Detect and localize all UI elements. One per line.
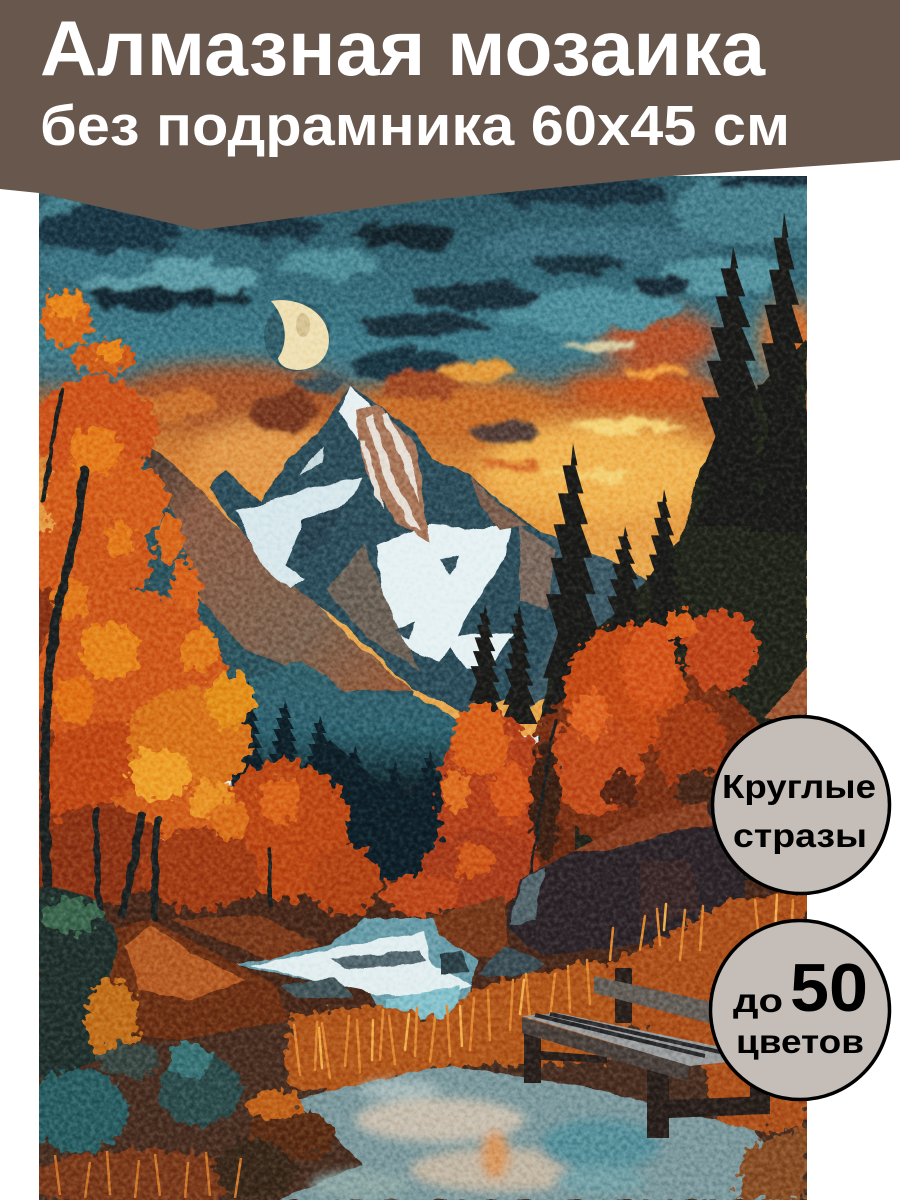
right orange grass — [600, 890, 807, 1130]
left teal-shaded mountain — [130, 456, 414, 696]
teal valley haze — [246, 661, 458, 799]
bench backrest — [594, 976, 710, 1024]
central ground — [39, 1020, 807, 1200]
badge: up to 50 colours: до — [733, 982, 783, 1019]
painterly mottled texture — [39, 176, 807, 1200]
yellow shrub — [86, 978, 138, 1062]
far bank — [430, 896, 509, 958]
bench — [522, 968, 770, 1138]
far right mountain — [528, 532, 646, 708]
badge: round rhinestones — [712, 716, 890, 894]
left brown mountain slope — [140, 440, 412, 690]
left autumn trees — [28, 290, 380, 915]
badge: round rhinestones: Круглые — [722, 768, 876, 805]
badge: up to 50 colours — [710, 920, 890, 1100]
base behind the left trees — [39, 574, 62, 898]
title: Алмазная мозаика — [40, 4, 766, 92]
sky background — [39, 176, 807, 736]
badge: up to 50 colours: 50 — [790, 950, 868, 1026]
badge: round rhinestones: стразы — [733, 817, 867, 854]
dark left undergrowth — [39, 885, 125, 1080]
tree trunks — [44, 390, 555, 918]
green shrub highlights — [40, 897, 100, 933]
orange grass band — [285, 960, 640, 1092]
right foreground grass — [735, 1125, 807, 1200]
header banner — [0, 0, 900, 230]
grass strokes — [294, 895, 793, 1078]
left foreground grass strokes — [55, 1151, 241, 1198]
gravel path — [280, 1066, 800, 1200]
bench seat — [522, 1013, 728, 1066]
base behind the central right trees — [530, 818, 575, 870]
boulder — [505, 668, 807, 955]
painting: autumn mountain landscape — [28, 173, 820, 1200]
river — [235, 918, 545, 1020]
base of the lower landscape — [39, 880, 807, 1085]
bench legs — [524, 968, 770, 1138]
dark right forest — [520, 340, 807, 900]
clouds — [36, 173, 820, 480]
moon — [264, 300, 330, 371]
snowy mountain — [208, 386, 558, 715]
badge: up to 50 colours: цветов — [736, 1023, 864, 1060]
path colour blotches — [310, 1080, 660, 1199]
dark valley forest — [231, 680, 446, 880]
sunset glow — [120, 300, 820, 554]
left foreground plants — [28, 1042, 335, 1200]
right autumn trees — [382, 609, 770, 917]
subtitle: без подрамника 60х45 см — [40, 94, 790, 158]
left river bank mound — [100, 915, 320, 1040]
conifers — [467, 212, 818, 724]
